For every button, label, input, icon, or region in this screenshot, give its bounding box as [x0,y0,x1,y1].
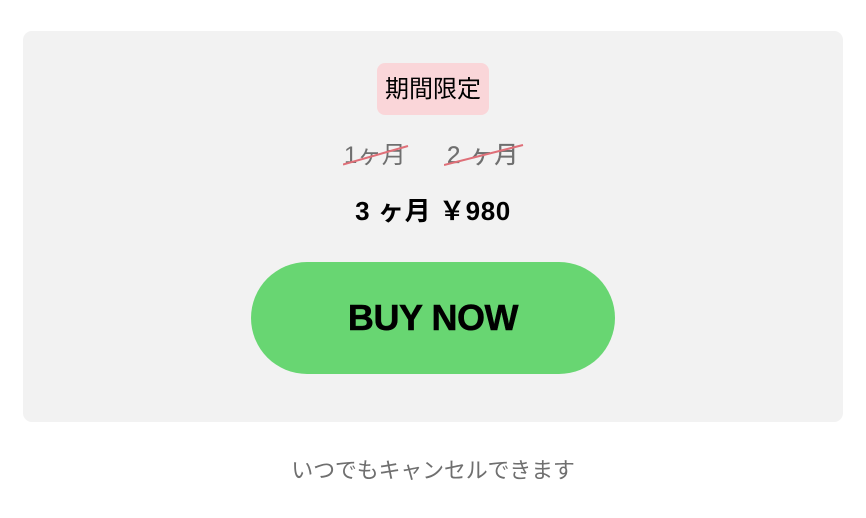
footnote: cancel anytime: いつでもキャンセルできます [291,458,575,483]
strike line [343,145,408,166]
current price: 3 ヶ月 ￥980 [355,196,511,226]
strike line [444,144,524,166]
old price: 1 month struck through [343,142,408,169]
label: 2 months: 2 ヶ月 [447,142,519,169]
badge: limited time: 期間限定 [385,76,481,103]
panel: offer card [23,31,843,422]
button: buy now: BUY NOW [348,297,518,338]
button: buy now [251,262,615,374]
badge: limited time [377,63,489,115]
old price: 2 months struck through [444,142,524,169]
label: 1 month: 1ヶ月 [344,142,406,169]
